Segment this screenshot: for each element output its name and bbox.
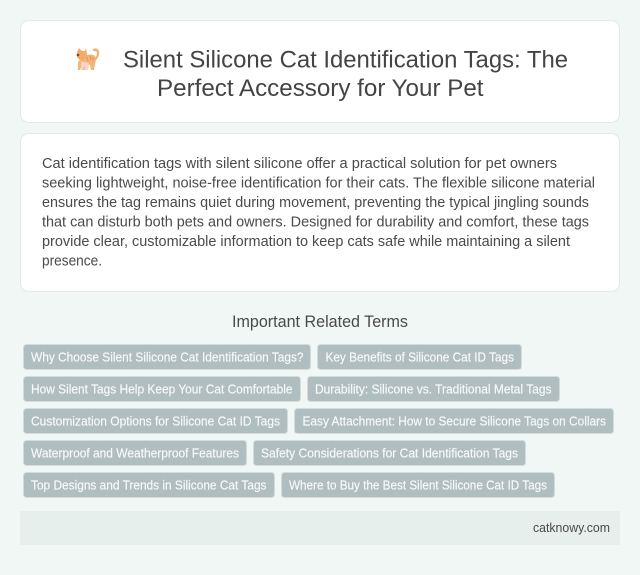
tag [24, 408, 288, 434]
tag: Customization Options for Silicone Cat ID Tags [31, 414, 280, 428]
tag: Key Benefits of Silicone Cat ID Tags [326, 350, 514, 364]
text block: description: Cat identification tags with silent silicone offer a practical solution for pet owners [42, 156, 557, 172]
tag [254, 440, 526, 466]
panel: description [20, 134, 620, 292]
tag: Why Choose Silent Silicone Cat Identification Tags? [31, 350, 304, 364]
tag [318, 344, 522, 370]
text block: description: provide clear, customizable information to keep cats safe while maintaining a silent [42, 234, 570, 250]
tag: Waterproof and Weatherproof Features [31, 446, 239, 460]
tag [24, 472, 274, 498]
title: Perfect Accessory for Your Pet [157, 75, 484, 102]
panel: title header [20, 20, 620, 122]
text block: description: ensures the tag remains quiet during movement, preventing the typical jingling sounds [42, 195, 589, 211]
icon: cat [77, 48, 99, 70]
tag [24, 440, 246, 466]
tag [294, 408, 614, 434]
footer text: catknowy.com [533, 520, 610, 535]
tag: Where to Buy the Best Silent Silicone Cat ID Tags [289, 478, 547, 492]
title: Silent Silicone Cat Identification Tags: The [123, 46, 568, 74]
tag [24, 344, 310, 370]
text block: description: that can disturb both pets and owners. Designed for durability and comfort, these tags [42, 214, 589, 230]
tag: Top Designs and Trends in Silicone Cat Tags [31, 478, 267, 492]
heading: related terms: Important Related Terms [232, 313, 408, 331]
tag: Safety Considerations for Cat Identification Tags [261, 446, 518, 460]
text block: description [42, 156, 595, 270]
tag: Durability: Silicone vs. Traditional Metal Tags [315, 382, 552, 396]
title [123, 46, 568, 102]
tag: Easy Attachment: How to Secure Silicone Tags on Collars [302, 414, 606, 428]
footer [20, 511, 620, 545]
tag [282, 472, 554, 498]
tag list: related terms [24, 344, 614, 498]
text block: description: presence. [42, 254, 102, 270]
text block: description: seeking lightweight, noise-free identification for their cats. The flexible silicone material [42, 176, 595, 192]
tag [308, 376, 560, 402]
tag: How Silent Tags Help Keep Your Cat Comfortable [31, 382, 292, 396]
tag [24, 376, 300, 402]
